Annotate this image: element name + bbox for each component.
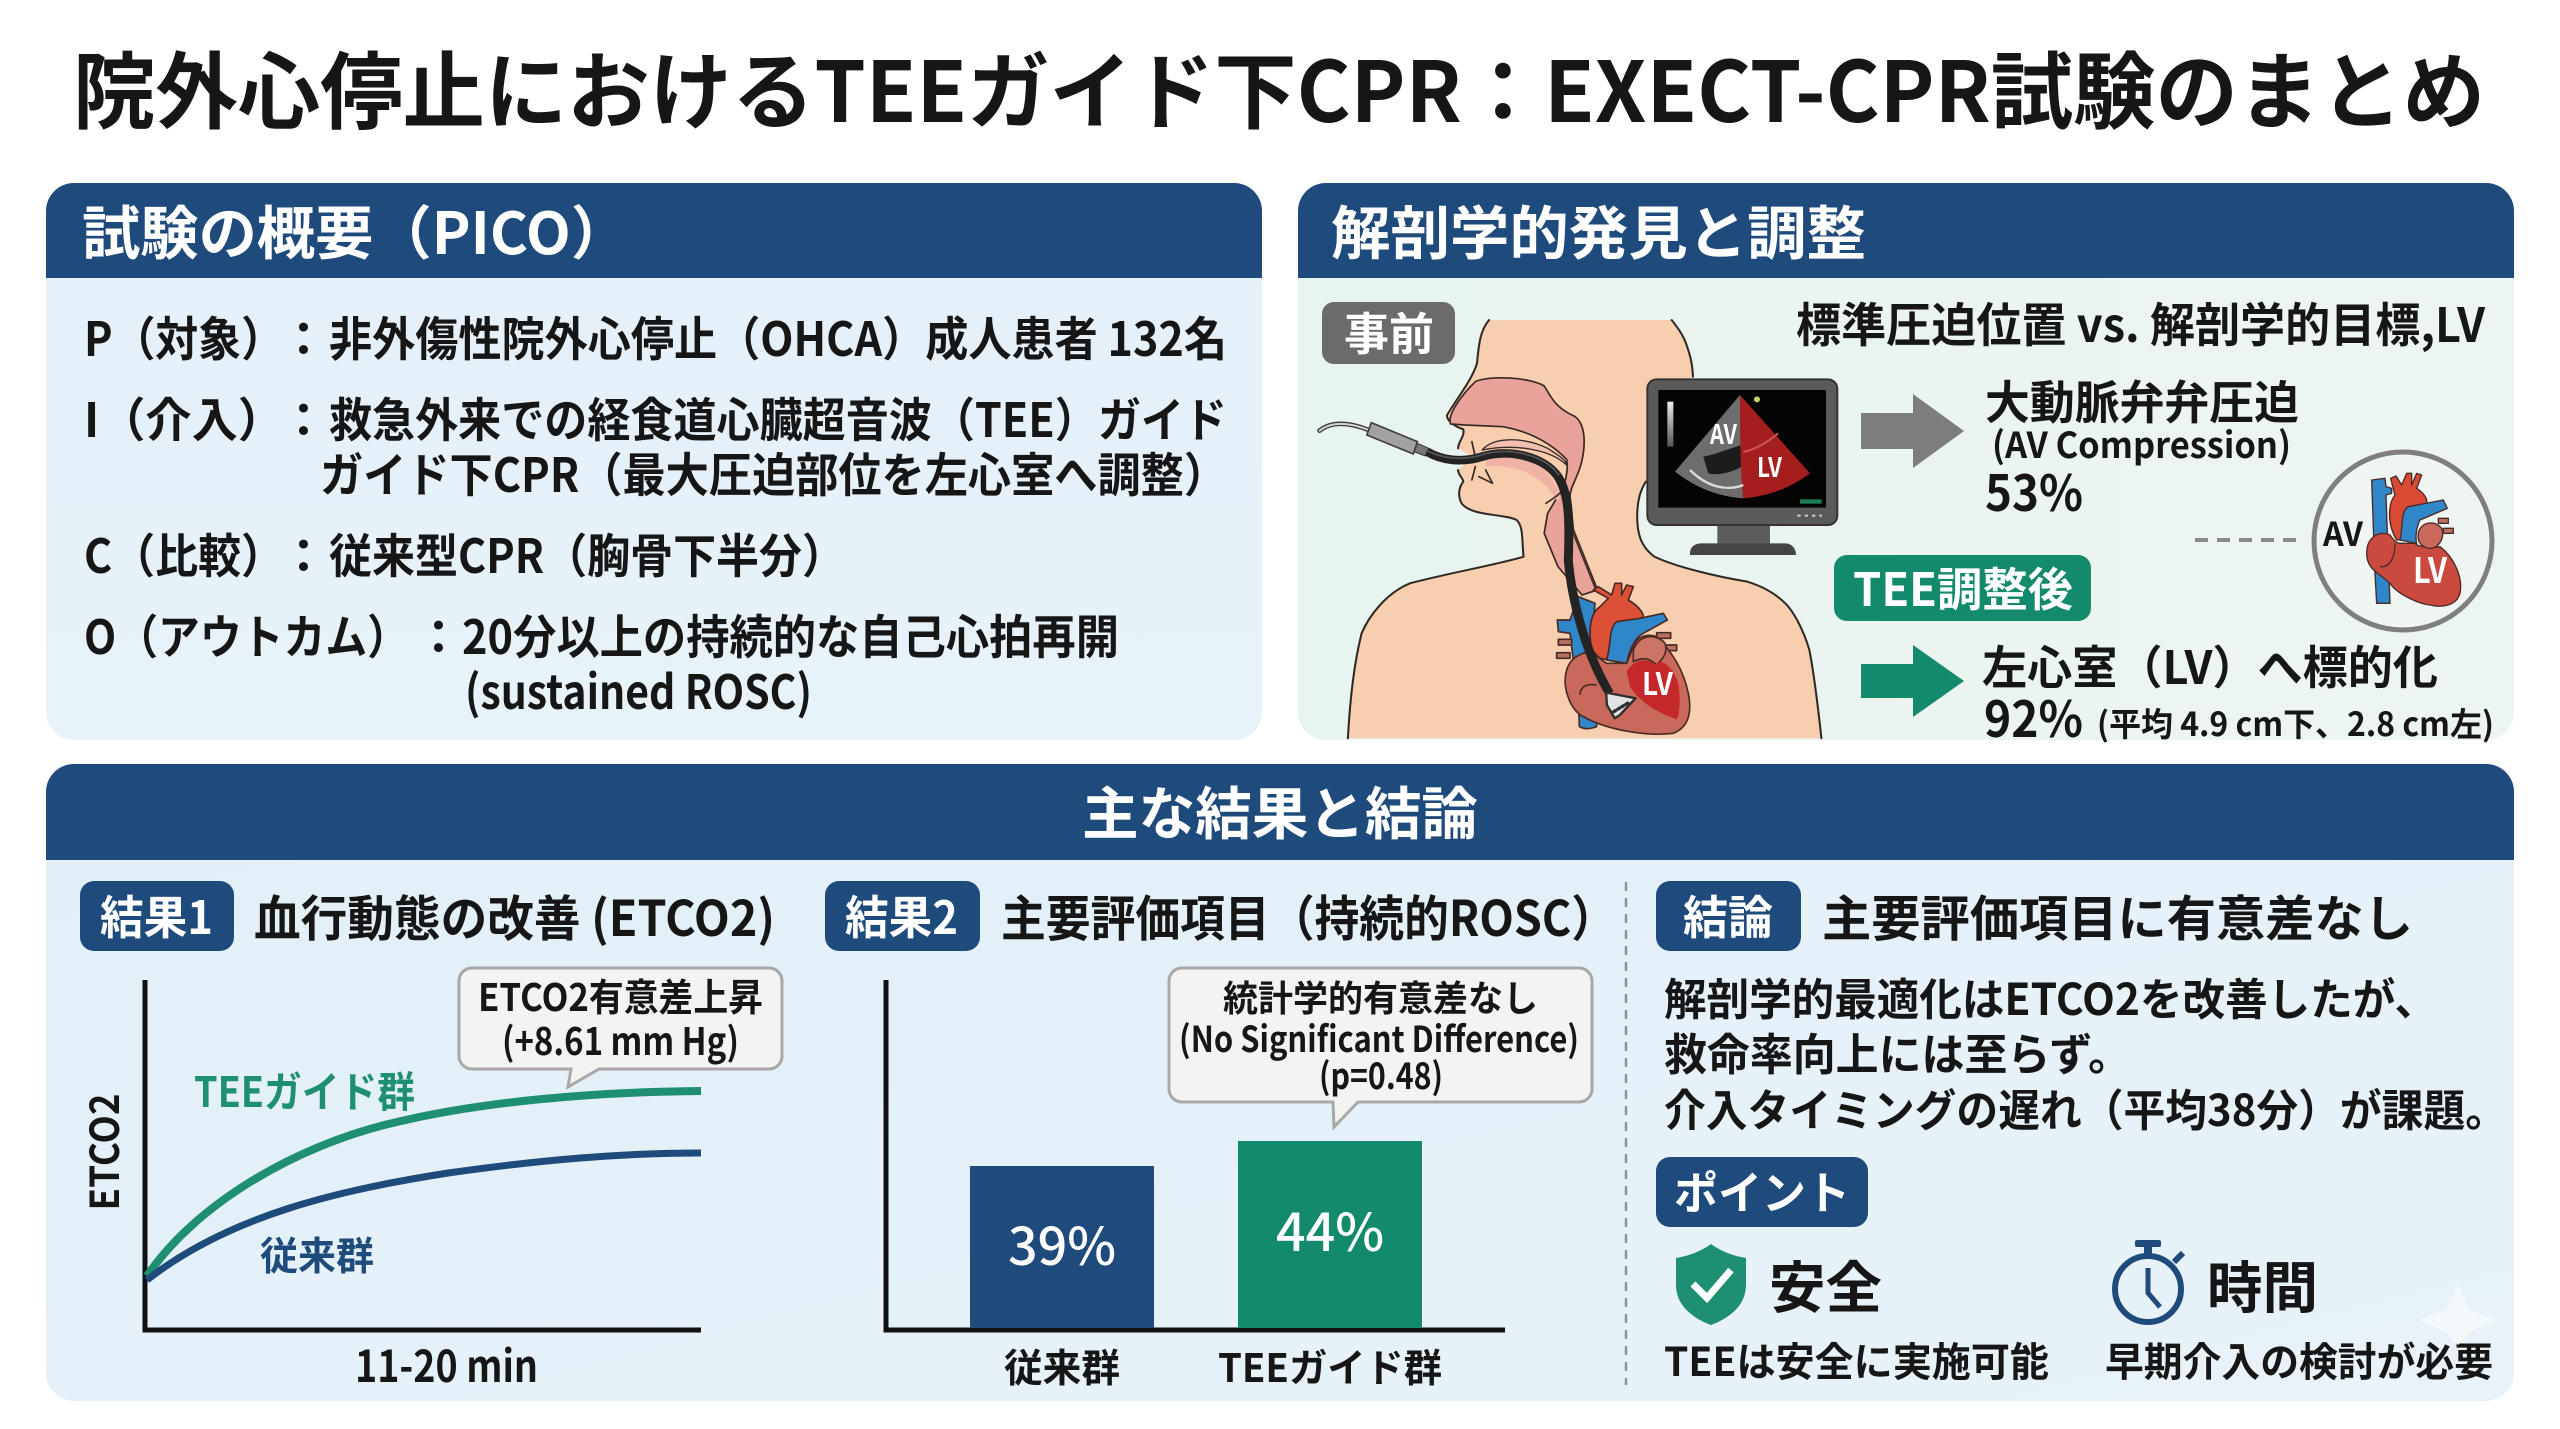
airway <box>1450 378 1598 595</box>
title: 院外心停止におけるTEEガイド下CPR：EXECT-CPR試験のまとめ <box>73 26 2485 147</box>
text: P population: 非外傷性院外心停止（OHCA）成人患者 132名 <box>329 301 1227 370</box>
badge: before: 事前 <box>1344 298 1434 363</box>
result 2 heading: 主要評価項目（持続的ROSC） <box>1001 880 1616 951</box>
icon: shield with check <box>1676 1244 1746 1325</box>
line chart: ETCO2 <box>73 967 782 1395</box>
text: LV targeting 92%: (平均 4.9 cm下、2.8 cm左) <box>2097 698 2494 746</box>
point: time <box>2105 1240 2493 1388</box>
illustration: TEE probe through the body into the heart <box>1320 320 1821 738</box>
line chart: ETCO2: 11-20 min <box>355 1331 538 1395</box>
callout: ETCO2 significant rise: ETCO2有意差上昇 <box>478 967 763 1022</box>
text: conclusion body: 介入タイミングの遅れ（平均38分）が課題。 <box>1664 1075 2507 1139</box>
conclusion heading: 結論 <box>1683 882 1773 948</box>
badge: point: ポイント <box>1674 1157 1850 1222</box>
text: conclusion body: 解剖学的最適化はETCO2を改善したが、 <box>1664 964 2437 1028</box>
panel: PICO overview <box>46 183 1262 740</box>
text: O outcome <box>84 599 1119 723</box>
text: O outcome: ： <box>415 599 462 668</box>
bar: TEE guided 44% <box>1238 1141 1422 1328</box>
line chart: ETCO2: ETCO2 <box>73 1094 131 1210</box>
bar: conventional 39% <box>970 1166 1154 1328</box>
text: O outcome: O（アウトカム） <box>84 599 409 668</box>
text: AV compression 53%: 53% <box>1985 454 2083 526</box>
result 1 heading: 血行動態の改善 (ETCO2) <box>254 880 775 951</box>
bar: TEE guided 44%: 44% <box>1276 1191 1384 1266</box>
panel: anatomical findings <box>1298 183 2514 752</box>
bar chart: sustained ROSC: TEEガイド群 <box>1218 1338 1442 1394</box>
text: I intervention <box>84 382 1227 506</box>
text: LV targeting 92%: 92% <box>1984 680 2083 752</box>
panel header: anatomical findings <box>1298 183 2514 278</box>
icon: echo monitor: AV <box>1709 413 1737 452</box>
callout: no significant difference: (No Significant Difference) <box>1179 1011 1579 1063</box>
icon: echo monitor: LV <box>1757 446 1782 485</box>
callout: no significant difference: (p=0.48) <box>1319 1048 1443 1100</box>
callout: no significant difference: 統計学的有意差なし <box>1223 970 1538 1022</box>
text: P population: ： <box>280 301 327 370</box>
text: O outcome: 20分以上の持続的な自己心拍再開 <box>462 599 1119 668</box>
panel header: anatomical findings: 解剖学的発見と調整 <box>1331 187 1866 271</box>
point: safety <box>1664 1244 2049 1388</box>
bar: conventional 39%: 39% <box>1008 1205 1116 1280</box>
text: conclusion body <box>1664 964 2507 1139</box>
result 1 heading: 結果1 <box>100 882 213 948</box>
icon: echo monitor <box>1647 379 1837 555</box>
text: I intervention: 救急外来での経食道心臓超音波（TEE）ガイド <box>329 382 1227 451</box>
icon: heart in circle: LV <box>2413 543 2447 594</box>
point: safety: 安全 <box>1769 1244 1882 1325</box>
connector: dashed line <box>2195 538 2299 542</box>
cable and probe <box>1320 423 1635 718</box>
text: AV compression 53% <box>1985 367 2299 526</box>
text: O outcome: (sustained ROSC) <box>465 654 812 723</box>
point: safety: TEEは安全に実施可能 <box>1664 1330 2049 1388</box>
panel header: results and conclusion <box>46 764 2514 860</box>
text: LV targeting 92%: 左心室（LV）へ標的化 <box>1982 632 2438 698</box>
icon: stopwatch <box>2115 1240 2183 1322</box>
result 2 heading: 結果2 <box>845 882 958 948</box>
panel header: PICO: 試験の概要（PICO） <box>82 187 629 271</box>
badge: before <box>1322 298 1455 364</box>
line chart: ETCO2: 従来群 <box>260 1226 374 1282</box>
point: time: 早期介入の検討が必要 <box>2105 1330 2493 1388</box>
text: I intervention: ガイド下CPR（最大圧迫部位を左心室へ調整） <box>320 437 1227 506</box>
illustration: TEE probe through the body into the heart: LV <box>1642 659 1674 704</box>
panel: main results and conclusion <box>46 764 2514 1401</box>
callout: ETCO2 significant rise: (+8.61 mm Hg) <box>502 1011 739 1066</box>
bar chart: sustained ROSC: 従来群 <box>1004 1338 1120 1394</box>
point: time: 時間 <box>2207 1244 2318 1325</box>
text: C comparison: C（比較） <box>84 518 284 587</box>
text: conclusion body: 救命率向上には至らず。 <box>1664 1019 2131 1083</box>
icon: heart in circle <box>2314 452 2492 630</box>
text: AV compression 53%: 大動脈弁弁圧迫 <box>1985 367 2299 433</box>
line chart: ETCO2: TEEガイド群 <box>194 1059 415 1120</box>
callout: ETCO2 significant rise <box>459 967 782 1087</box>
text: P population: P（対象） <box>84 301 284 370</box>
heart <box>1557 583 1690 734</box>
panel header: results and conclusion: 主な結果と結論 <box>1082 769 1478 851</box>
text: LV targeting 92% <box>1982 632 2494 752</box>
badge: after TEE adjustment: TEE調整後 <box>1853 554 2073 620</box>
bar chart: sustained ROSC <box>886 968 1592 1394</box>
arrow: green to LV targeting <box>1861 645 1964 717</box>
arrow: grey to AV compression <box>1861 394 1964 468</box>
panel header: PICO <box>46 183 1262 278</box>
text: AV compression 53%: (AV Compression) <box>1992 417 2291 469</box>
icon: heart in circle: AV <box>2322 508 2364 556</box>
text: I intervention: ： <box>280 382 327 451</box>
text: C comparison: ： <box>280 518 327 587</box>
text: C comparison: 従来型CPR（胸骨下半分） <box>329 518 845 587</box>
text: C comparison <box>84 518 845 587</box>
text: I intervention: I（介入） <box>84 382 284 451</box>
text: standard vs anatomical target: 標準圧迫位置 vs. 解剖学的目標,LV <box>1796 287 2486 356</box>
callout: no significant difference <box>1169 968 1592 1127</box>
conclusion heading: 主要評価項目に有意差なし <box>1822 880 2413 951</box>
